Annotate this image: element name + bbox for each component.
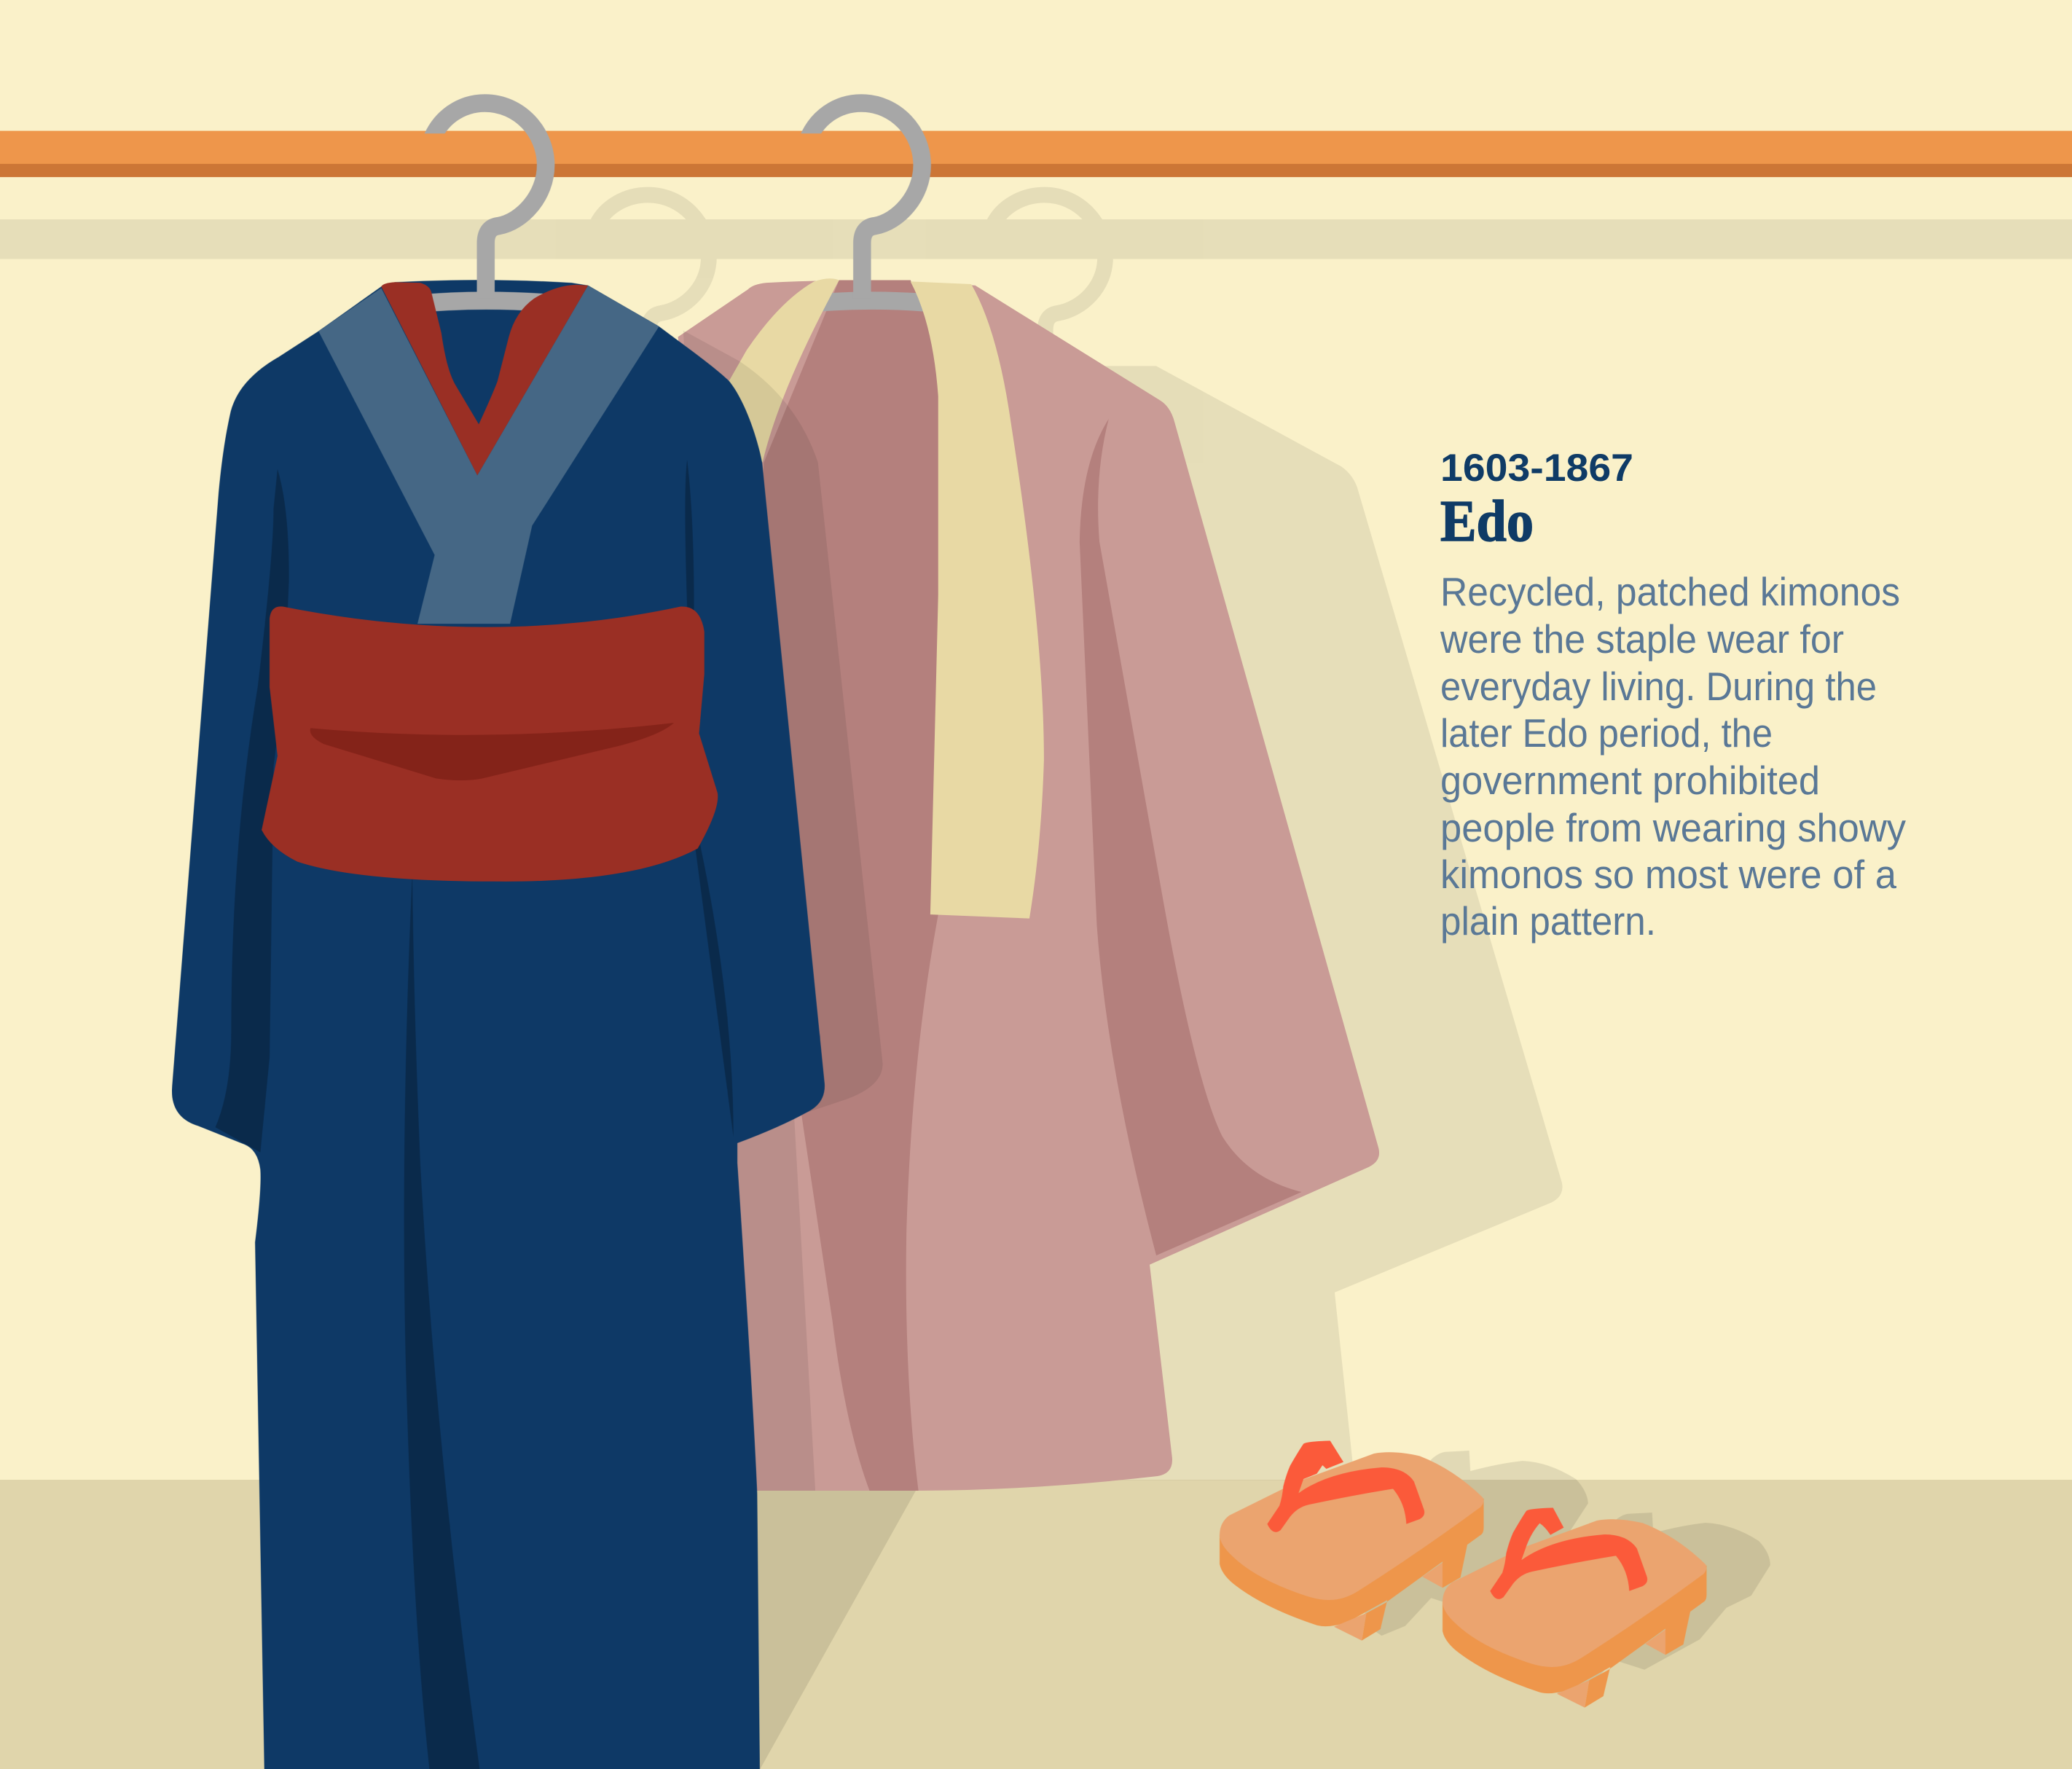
body paragraph: people from wearing showy [1440,805,1906,850]
heading: Edo [1440,490,1534,554]
hanger hook navy [429,103,546,299]
cast shadows on floor and sandals [713,1451,1770,1769]
sandal right plate [1443,1519,1706,1667]
sandal left strap [1267,1440,1424,1532]
red obi sash [262,606,718,882]
navy kimono body [172,280,825,1769]
clothes rail [0,131,2072,177]
red inner collar [381,282,588,475]
cream collar right [911,281,1044,919]
pink sleeve fold [1080,419,1302,1255]
cream collar left [721,278,839,463]
sandal right strap [1490,1507,1647,1599]
pink kimono inner panel [760,281,938,1491]
sandal right side [1443,1566,1706,1708]
cast shadows on wall [0,195,2072,1480]
body paragraph: kimonos so most were of a [1440,852,1896,897]
body paragraph: Recycled, patched kimonos [1440,569,1900,614]
text block: Edo period [1440,447,1906,944]
body paragraph: government prohibited [1440,758,1820,803]
navy centre fold [404,872,479,1769]
hanger bar navy [431,301,544,302]
hanger hook pink [806,103,922,299]
sandal right rear foot [1645,1625,1671,1655]
body paragraph: plain pattern. [1440,898,1656,944]
hanger bar pink [820,301,925,302]
sandal left front foot [1334,1613,1366,1641]
obi shadow [310,723,674,780]
body paragraph: were the staple wear for [1440,616,1844,662]
geta sandal right [1443,1507,1706,1708]
body paragraph: later Edo period, the [1440,710,1773,756]
body paragraph: everyday living. During the [1440,664,1877,709]
sandal left side [1220,1499,1483,1641]
sandal right front foot [1557,1680,1589,1708]
blue collar [318,286,659,624]
kimono shadow on pink [683,330,883,1491]
geta sandal left [1220,1440,1483,1641]
navy kimono [172,103,825,1769]
pink kimono body [678,281,1379,1491]
body paragraph [1440,569,1906,944]
navy left sleeve fold [216,469,289,1153]
sandal left rear foot [1422,1558,1448,1588]
sandal left plate [1220,1452,1483,1600]
pink kimono [678,103,1379,1491]
date range: 1603-1867 [1440,447,1633,490]
floor [0,1480,2072,1769]
navy right sleeve fold [685,460,734,1137]
